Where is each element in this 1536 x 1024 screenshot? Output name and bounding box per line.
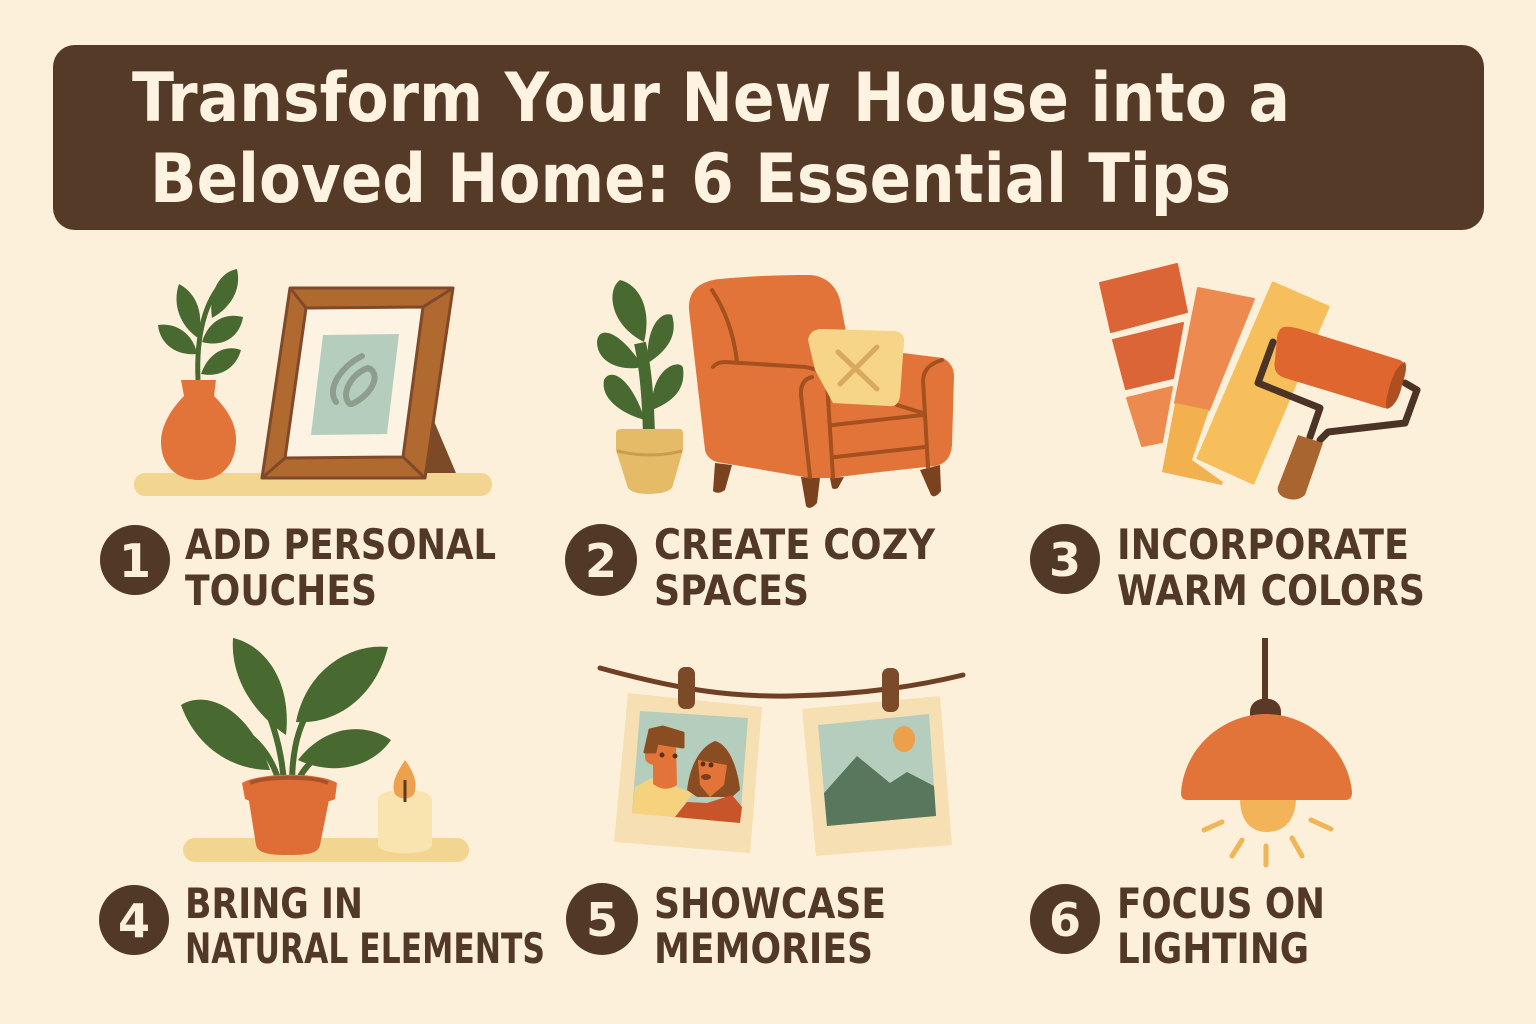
label 3: [1117, 520, 1425, 615]
badge 2: [565, 524, 637, 596]
title banner: [53, 45, 1484, 230]
cushion: [808, 329, 904, 406]
title: Transform Your New House into a: [132, 59, 1290, 138]
label 4: BRING IN: [185, 879, 363, 928]
label 1: [185, 520, 496, 615]
label 6: FOCUS ON: [1117, 879, 1325, 928]
label 6: [1117, 879, 1325, 973]
paint roller handle: [1258, 342, 1417, 440]
icon: vase and picture frame on shelf: [134, 269, 492, 496]
badge 1: [100, 525, 170, 595]
plant pot: [616, 429, 683, 494]
label 5: SHOWCASE: [654, 879, 886, 928]
icon: paint swatches and roller: [1100, 264, 1417, 500]
label 5: MEMORIES: [654, 924, 873, 973]
icon: armchair with plant: [597, 275, 954, 508]
label 2: SPACES: [654, 566, 809, 615]
icon: photos on a string: [600, 667, 963, 856]
label 2: CREATE COZY: [654, 520, 936, 569]
badge 6: [1030, 884, 1100, 954]
title: [132, 59, 1290, 219]
label 4: NATURAL ELEMENTS: [185, 924, 545, 973]
label 1: TOUCHES: [185, 566, 377, 615]
icon: pendant lamp: [1181, 638, 1352, 865]
label 3: WARM COLORS: [1117, 566, 1425, 615]
badge 3: 3: [1049, 533, 1081, 587]
badge 4: [99, 885, 169, 955]
label 6: LIGHTING: [1117, 924, 1309, 973]
photo: couple: [614, 693, 762, 853]
badge 6: 6: [1049, 893, 1081, 947]
label 2: [654, 520, 936, 615]
roller sleeve: [1274, 327, 1406, 408]
label 5: [654, 879, 886, 973]
badge 1: 1: [119, 534, 151, 588]
title: Beloved Home: 6 Essential Tips: [150, 140, 1231, 219]
armchair body: [689, 275, 954, 478]
label 4: [185, 879, 545, 973]
badge 5: [566, 883, 638, 955]
photo: mountain: [802, 696, 952, 856]
badge 2: 2: [585, 534, 617, 588]
badge 5: 5: [586, 893, 618, 947]
badge 3: [1030, 524, 1100, 594]
label 3: INCORPORATE: [1117, 520, 1409, 569]
badge 4: 4: [118, 894, 150, 948]
label 1: ADD PERSONAL: [185, 520, 496, 569]
icon: potted plant and candle: [181, 638, 469, 862]
